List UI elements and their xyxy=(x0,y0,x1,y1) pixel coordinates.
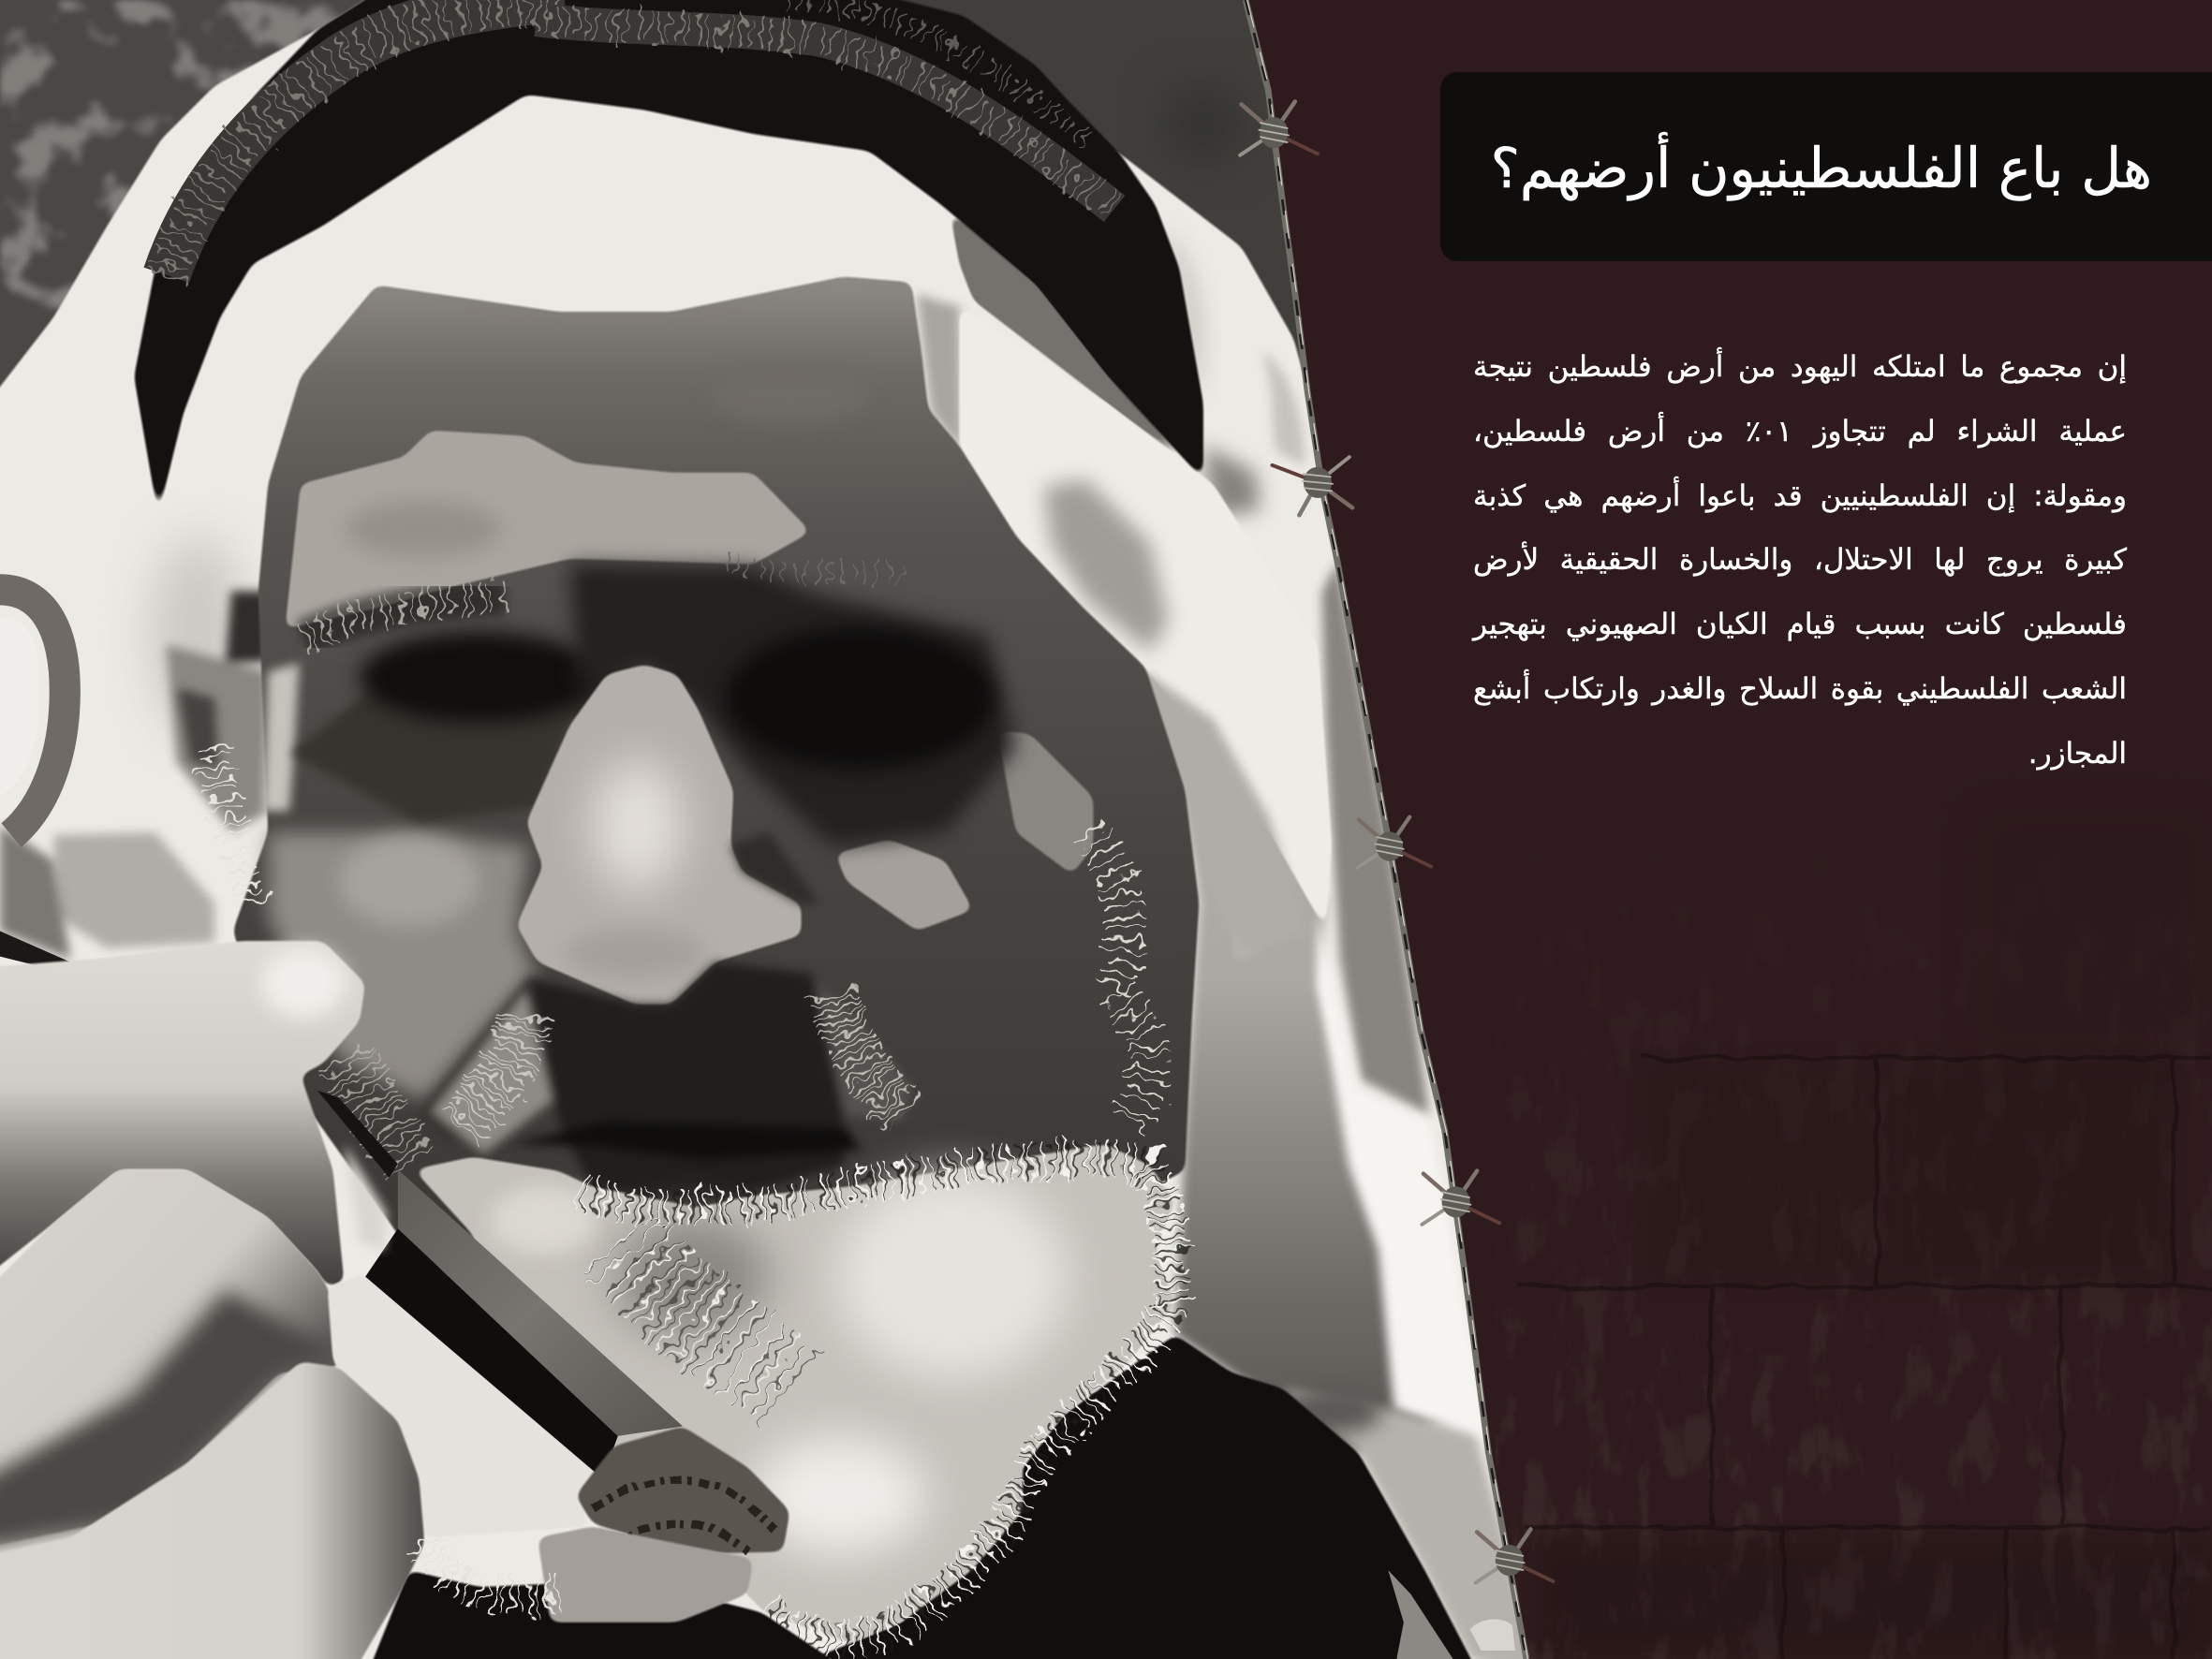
top finger xyxy=(0,941,365,1286)
sideburn hairs xyxy=(212,748,1150,1128)
middle finger xyxy=(0,1169,345,1549)
barbed wire xyxy=(1240,0,1554,1659)
black lower area left of beard xyxy=(365,1570,861,1659)
key ring at left xyxy=(0,590,65,835)
eye sockets and brows xyxy=(290,562,1016,846)
barb 2 xyxy=(1272,457,1354,517)
lower finger xyxy=(0,1361,424,1659)
dark under middle finger xyxy=(0,1291,339,1549)
barb 3 xyxy=(1357,817,1431,868)
beard xyxy=(413,1144,1175,1643)
left cheek xyxy=(268,832,536,1100)
white cloth beneath cigar xyxy=(327,1274,602,1537)
body text block: عملية الشراء لم تتجاوز ١٠٪ من أرض فلسطين، xyxy=(1473,415,2127,448)
body text block: كبيرة يروج لها الاحتلال، والخسارة الحقيقية لأرض xyxy=(1473,543,2127,577)
left cloth shadow with ring xyxy=(0,591,275,971)
body text block: إن مجموع ما امتلكه اليهود من أرض فلسطين نتيجة xyxy=(1473,350,2127,384)
cigar xyxy=(317,1091,790,1622)
hand holding cigar xyxy=(0,941,602,1659)
agal head band xyxy=(134,0,1203,516)
body text block xyxy=(1472,346,2128,771)
thumb tip on cigar xyxy=(345,1144,387,1250)
photo backdrop xyxy=(0,0,1302,388)
face xyxy=(233,276,1199,1270)
forehead wrinkle light band xyxy=(285,431,811,629)
lower beard hairs xyxy=(423,1545,557,1596)
wall texture xyxy=(1509,1053,2212,1659)
barb 1 xyxy=(1240,101,1318,155)
nose xyxy=(516,665,818,1005)
highlight at lower shoulder xyxy=(1470,1620,1515,1651)
keffiyeh cloth xyxy=(0,0,1552,1659)
portrait of an elderly Palestinian man in keffiyeh xyxy=(0,0,1552,1659)
grey lower part of fold xyxy=(1145,671,1305,960)
grey wedge at lower shoulder xyxy=(1388,1570,1453,1659)
title box xyxy=(1440,72,2212,261)
body text block: فلسطين كانت بسبب قيام الكيان الصهيوني بتهجير xyxy=(1473,608,2127,641)
title: هل باع الفلسطينيون أرضهم؟ xyxy=(1491,136,2152,200)
fingertip highlight xyxy=(261,948,346,1019)
body text block: المجازر. xyxy=(2028,737,2127,771)
mouth and moustache shadow xyxy=(346,962,911,1208)
knuckle under cigar end xyxy=(538,1526,753,1622)
barb 5 xyxy=(1476,1529,1554,1583)
moustache right xyxy=(818,985,911,1122)
body text block: الشعب الفلسطيني بقوة السلاح والغدر وارتكاب أبشع xyxy=(1473,672,2127,706)
light hair fringe xyxy=(579,1158,1173,1639)
body text block: ومقولة: إن الفلسطينيين قد باعوا أرضهم هي كذبة xyxy=(1473,479,2127,513)
barb 4 xyxy=(1422,1171,1499,1225)
shaded patch in the fold xyxy=(1044,479,1168,652)
dark hair fringe xyxy=(579,1158,1173,1639)
moustache left xyxy=(430,989,553,1154)
dark chest clothing xyxy=(761,1334,1482,1659)
white cloth fold right of face xyxy=(959,306,1332,931)
right cheek patches xyxy=(997,731,1093,874)
crumpled cigar end xyxy=(576,1426,790,1553)
